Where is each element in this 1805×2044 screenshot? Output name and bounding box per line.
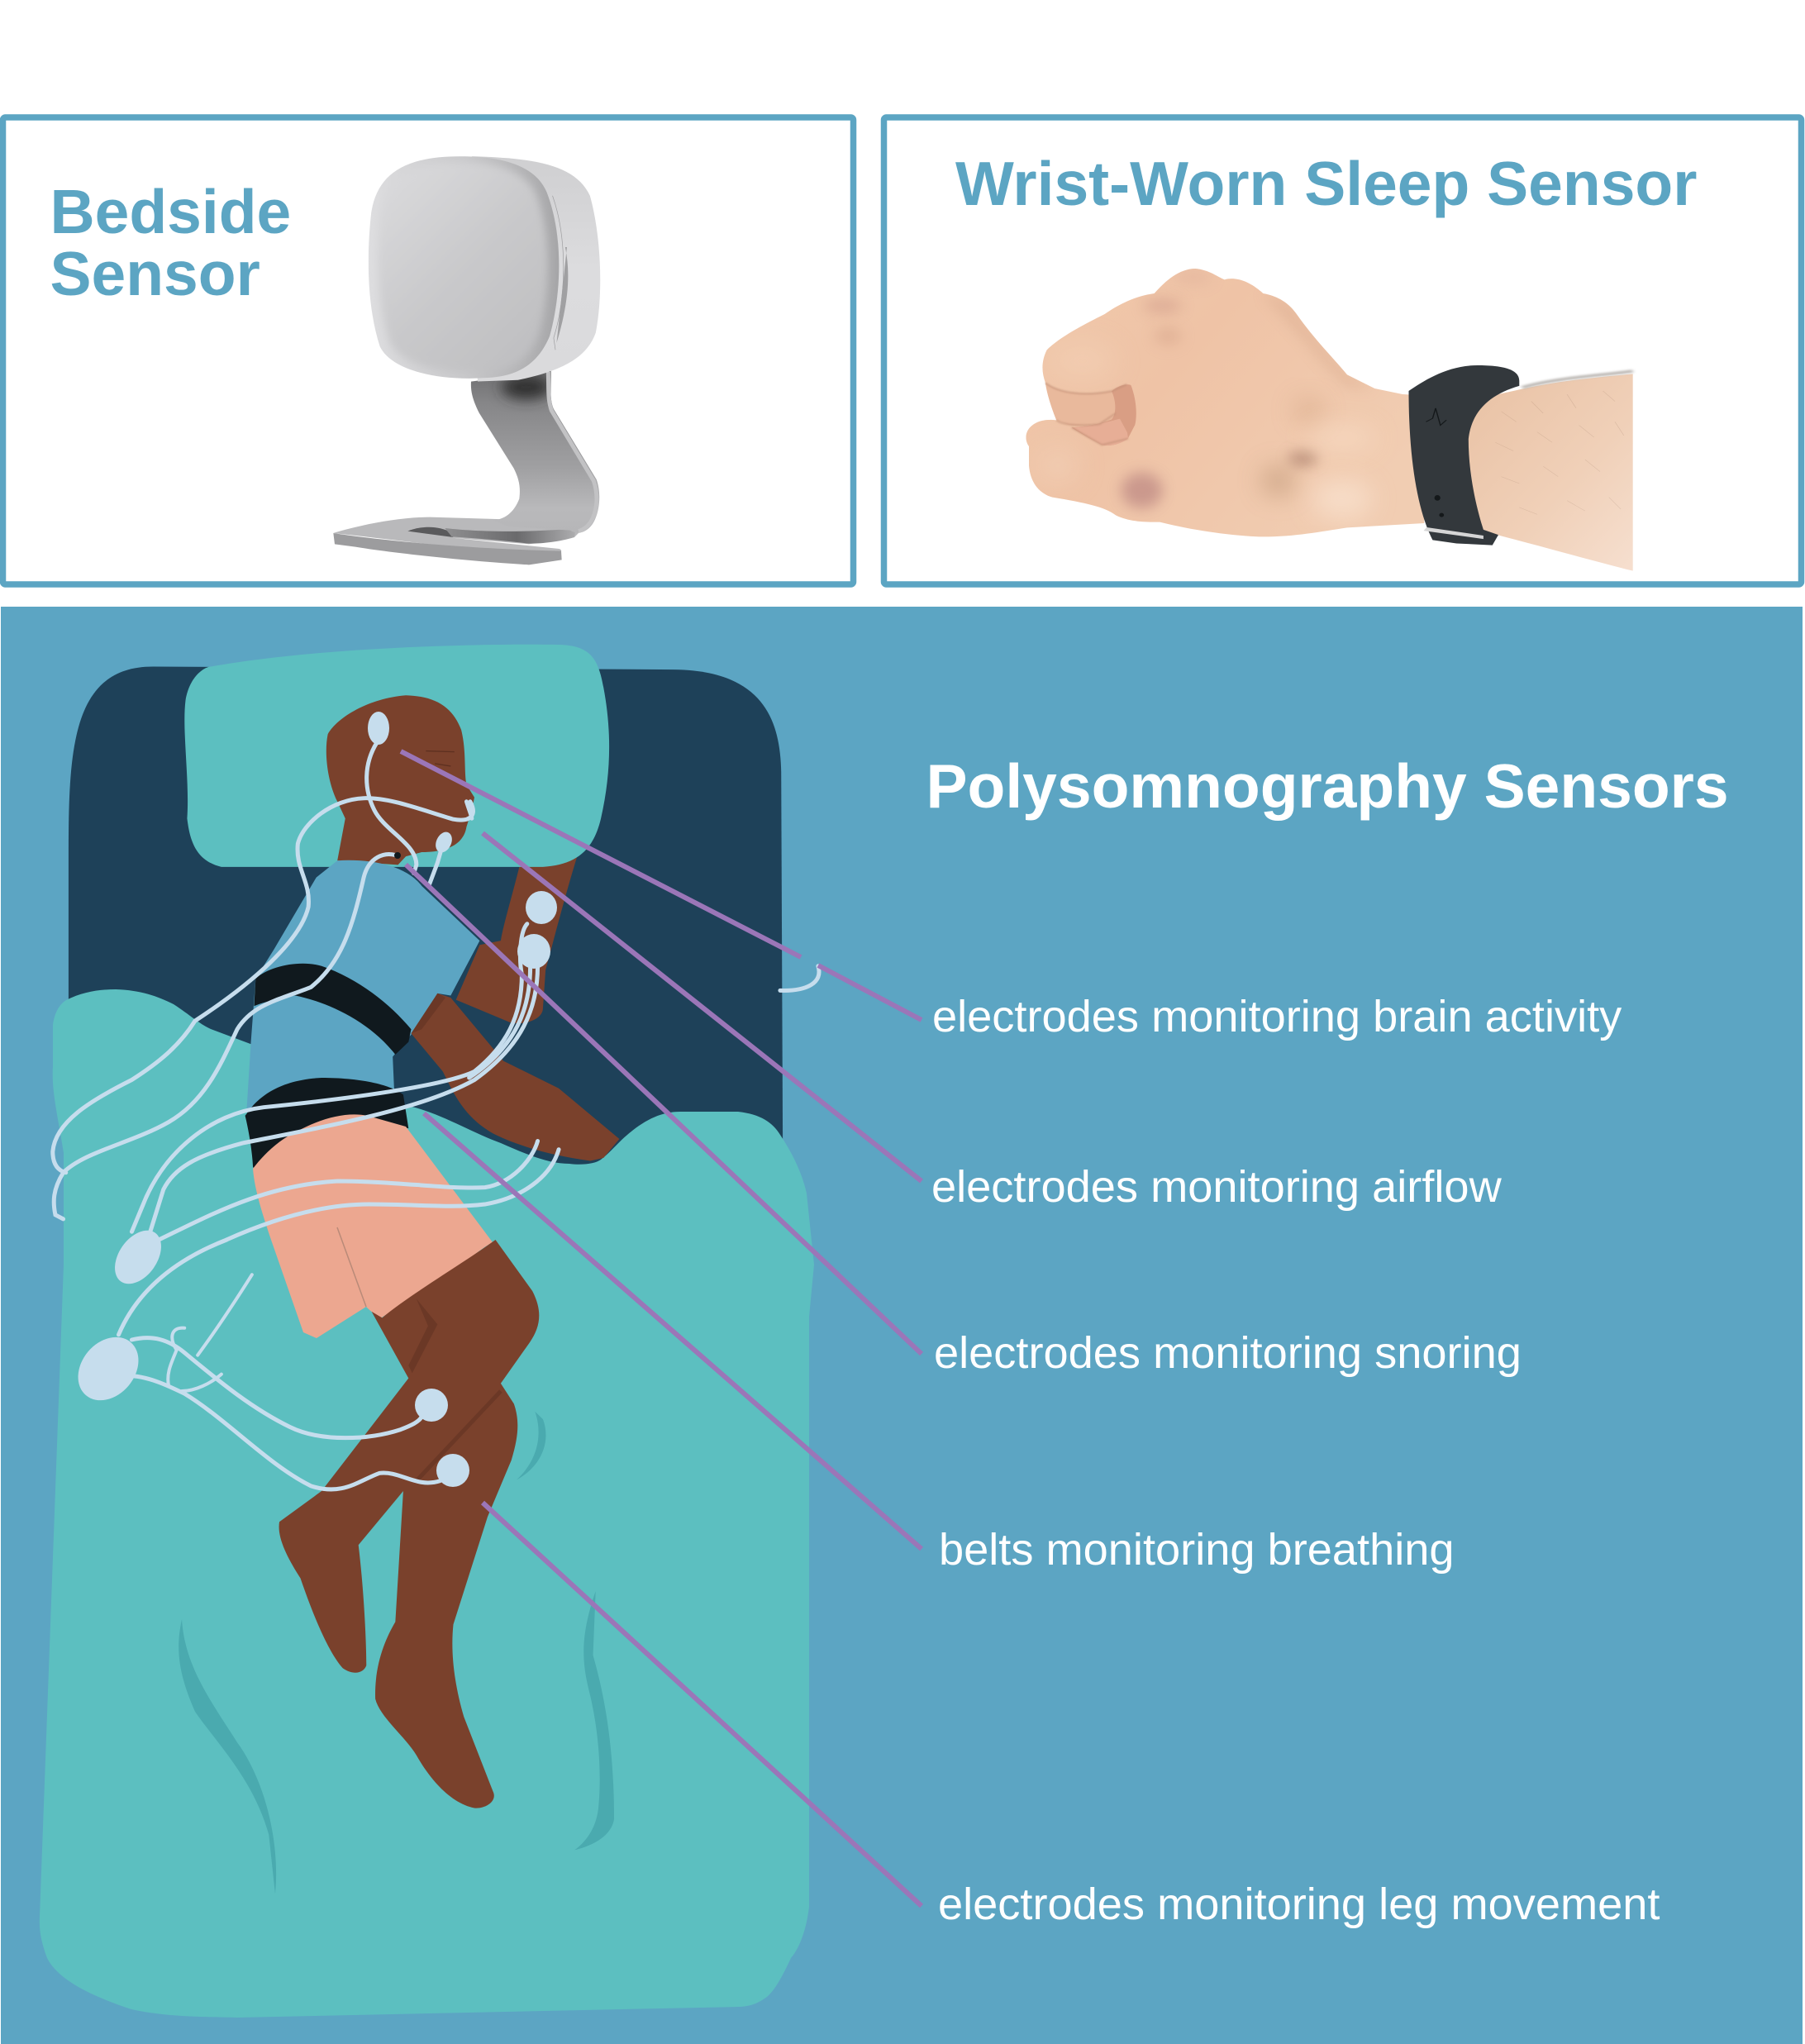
label: airflow: electrodes monitoring airflow [931, 1162, 1503, 1212]
label: leg movement: electrodes monitoring leg movement [938, 1880, 1660, 1929]
far arm [456, 856, 577, 1023]
heading: Bedside Sensor: Sensor [50, 239, 260, 308]
blanket [40, 989, 814, 2018]
heading: Wrist-Worn Sleep Sensor: Wrist-Worn Sleep Sensor [955, 149, 1697, 218]
label: brain activity: electrodes monitoring brain activity [932, 992, 1622, 1041]
icon: hand with wristband [1017, 256, 1633, 571]
label: snoring: electrodes monitoring snoring [934, 1328, 1522, 1378]
icon: bedside sensor device [333, 153, 600, 565]
person: head [326, 695, 474, 865]
pillow [184, 645, 609, 867]
electrodes [65, 712, 557, 1487]
heading: Bedside Sensor: Bedside [50, 177, 291, 246]
pointer lines [401, 751, 922, 1906]
belt: abdomen [245, 1078, 408, 1168]
person: shirt [246, 860, 479, 1109]
electrode wires: upper body [53, 742, 819, 1240]
person: legs [279, 1240, 539, 1808]
bed mattress [69, 667, 783, 1194]
person: shorts [253, 1114, 493, 1338]
blanket folds [179, 1412, 614, 1894]
person: near arm [411, 993, 619, 1160]
panel: polysomnography sensors [1, 607, 1803, 2044]
panel: wrist-worn sleep sensor [884, 117, 1802, 584]
heading: Bedside Sensor [50, 177, 291, 308]
label: breathing: belts monitoring breathing [939, 1525, 1455, 1575]
belt: chest [254, 964, 411, 1055]
electrode wires: lower body [119, 1240, 441, 1489]
heading: Polysomnography Sensors: Polysomnography Sensors [926, 751, 1729, 821]
panel: bedside sensor [3, 117, 853, 584]
